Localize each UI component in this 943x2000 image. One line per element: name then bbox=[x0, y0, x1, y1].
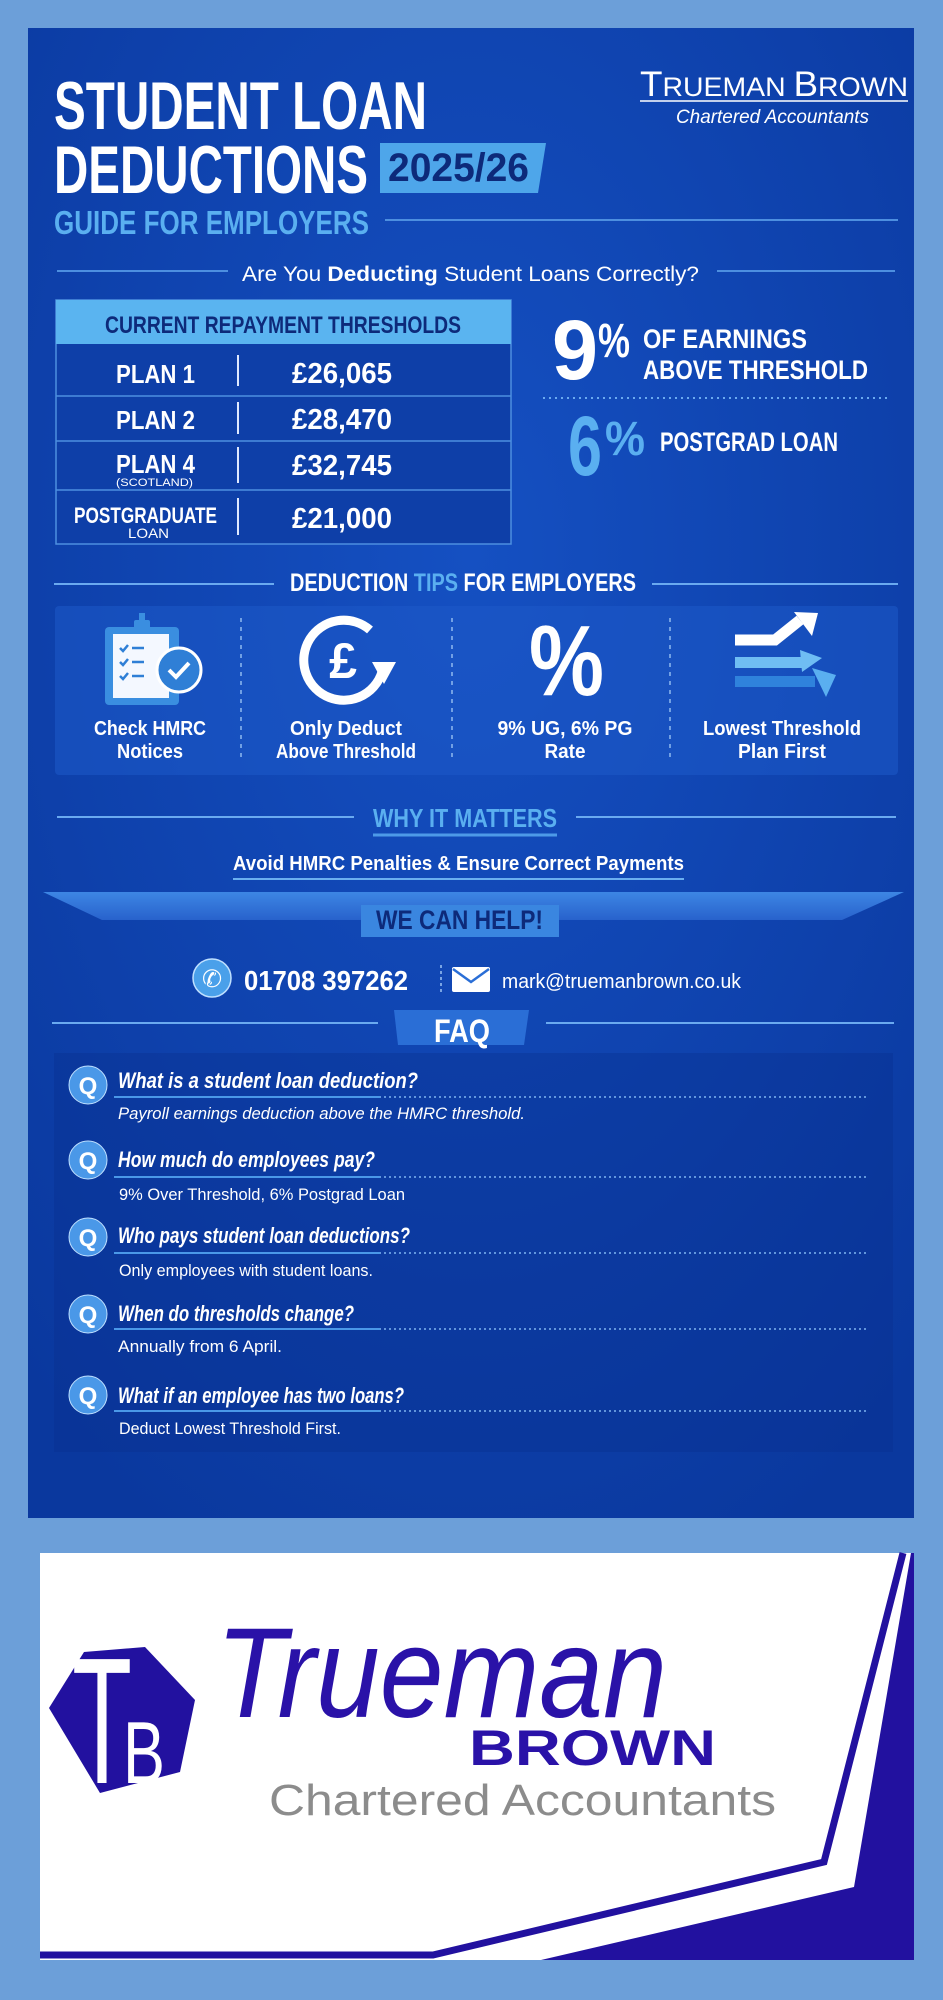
icon: TB hexagon: T bbox=[72, 1621, 132, 1822]
logo: Trueman Brown header: Chartered Accountants bbox=[676, 107, 869, 128]
table: current repayment thresholds: LOAN bbox=[128, 525, 169, 541]
stat: 9% of earnings bbox=[552, 303, 868, 397]
icon: percent: % bbox=[529, 605, 604, 717]
logo panel: Trueman Brown: Trueman bbox=[216, 1602, 667, 1745]
table: current repayment thresholds: (SCOTLAND) bbox=[116, 477, 193, 489]
table: current repayment thresholds: £28,470 bbox=[292, 404, 392, 436]
table: current repayment thresholds: PLAN 4 bbox=[116, 449, 195, 479]
icon: pound with arrow: £ bbox=[329, 633, 357, 689]
contact row bbox=[193, 959, 742, 997]
stat: 9% of earnings: ABOVE THRESHOLD bbox=[643, 355, 868, 385]
text: avoid penalties: Avoid HMRC Penalties & Ensure Correct Payments bbox=[233, 853, 684, 875]
icon: clipboard bbox=[105, 613, 201, 705]
panel: main infographic bbox=[28, 28, 914, 1518]
panel: FAQ list: Deduct Lowest Threshold First. bbox=[119, 1419, 341, 1438]
tip labels: Plan First bbox=[738, 741, 826, 763]
icon: envelope bbox=[452, 967, 490, 992]
panel: FAQ list: Q bbox=[79, 1225, 97, 1252]
panel: FAQ list bbox=[54, 1053, 893, 1452]
title bbox=[54, 68, 427, 208]
contact row: mark@truemanbrown.co.uk bbox=[502, 971, 742, 993]
heading: why it matters: WHY IT MATTERS bbox=[373, 803, 557, 833]
panel: FAQ list: Only employees with student loans. bbox=[119, 1261, 373, 1280]
tip labels: Check HMRC bbox=[94, 718, 206, 740]
title: DEDUCTIONS bbox=[54, 132, 368, 208]
panel: FAQ list: Q bbox=[79, 1073, 97, 1100]
stat: 9% of earnings: OF EARNINGS bbox=[643, 324, 807, 354]
heading: FAQ bbox=[52, 1010, 894, 1049]
logo: Trueman Brown header: TRUEMAN BROWN bbox=[640, 65, 908, 104]
panel: FAQ list: Annually from 6 April. bbox=[118, 1337, 282, 1356]
badge: 2025/26: 2025/26 bbox=[388, 146, 529, 190]
ribbon: we can help bbox=[43, 892, 904, 937]
panel: FAQ list: Who pays student loan deductions? bbox=[118, 1223, 410, 1248]
logo: Trueman Brown header bbox=[640, 65, 908, 128]
panel: FAQ list: What if an employee has two loans? bbox=[118, 1383, 404, 1408]
stat: 6% postgrad: POSTGRAD LOAN bbox=[660, 427, 838, 457]
panel: FAQ list: What is a student loan deduction? bbox=[118, 1068, 418, 1093]
panel: FAQ list: Q bbox=[79, 1302, 97, 1329]
icon: arrows bbox=[735, 612, 836, 697]
icon: pound with arrow bbox=[304, 620, 396, 700]
table: current repayment thresholds: £26,065 bbox=[292, 358, 392, 390]
tip labels: 9% UG, 6% PG bbox=[498, 718, 632, 740]
tip labels: Only Deduct bbox=[290, 718, 402, 740]
title: STUDENT LOAN bbox=[54, 68, 427, 144]
panel: FAQ list: When do thresholds change? bbox=[118, 1301, 354, 1326]
contact row: 01708 397262 bbox=[244, 965, 408, 996]
panel: FAQ list: Payroll earnings deduction above the HMRC threshold. bbox=[118, 1104, 525, 1123]
tip labels: Rate bbox=[544, 741, 586, 763]
icon: TB hexagon: B bbox=[123, 1703, 165, 1802]
table: current repayment thresholds: CURRENT REPAYMENT THRESHOLDS bbox=[105, 312, 461, 339]
stat: 6% postgrad: % bbox=[605, 413, 645, 466]
logo panel: Trueman Brown: BROWN bbox=[469, 1720, 716, 1776]
icon: phone: ✆ bbox=[202, 966, 222, 993]
table: current repayment thresholds: £32,745 bbox=[292, 450, 392, 482]
heading: FAQ: FAQ bbox=[434, 1013, 490, 1049]
tip labels bbox=[94, 718, 861, 763]
panel: FAQ list: How much do employees pay? bbox=[118, 1147, 375, 1172]
panel: FAQ list: Q bbox=[79, 1383, 97, 1410]
table: current repayment thresholds: PLAN 2 bbox=[116, 405, 195, 435]
panel: FAQ list: 9% Over Threshold, 6% Postgrad Loan bbox=[119, 1185, 405, 1204]
heading: deduction tips: DEDUCTION TIPS FOR EMPLOYERS bbox=[290, 569, 636, 597]
panel: tips bbox=[55, 605, 898, 775]
icon: phone bbox=[193, 959, 231, 997]
logo panel: Trueman Brown: Chartered Accountants bbox=[269, 1776, 776, 1825]
tip labels: Notices bbox=[117, 741, 183, 763]
table: current repayment thresholds: POSTGRADUATE bbox=[74, 503, 217, 528]
stat: 9% of earnings: % bbox=[598, 315, 630, 368]
stat: 9% of earnings: 9 bbox=[552, 303, 598, 397]
stat: 6% postgrad: 6 bbox=[568, 399, 602, 493]
ribbon: we can help: WE CAN HELP! bbox=[376, 905, 543, 935]
table: current repayment thresholds: PLAN 1 bbox=[116, 359, 195, 389]
tip labels: Lowest Threshold bbox=[703, 718, 861, 740]
table: current repayment thresholds: £21,000 bbox=[292, 503, 392, 535]
panel: FAQ list: Q bbox=[79, 1148, 97, 1175]
heading: are you deducting: Are You Deducting Student Loans Correctly? bbox=[242, 263, 699, 286]
stat: 6% postgrad bbox=[568, 399, 838, 493]
tip labels: Above Threshold bbox=[276, 741, 416, 763]
logo panel: Trueman Brown bbox=[40, 1553, 914, 1960]
table: current repayment thresholds bbox=[56, 300, 511, 544]
subtitle: guide for employers: GUIDE FOR EMPLOYERS bbox=[54, 204, 369, 241]
